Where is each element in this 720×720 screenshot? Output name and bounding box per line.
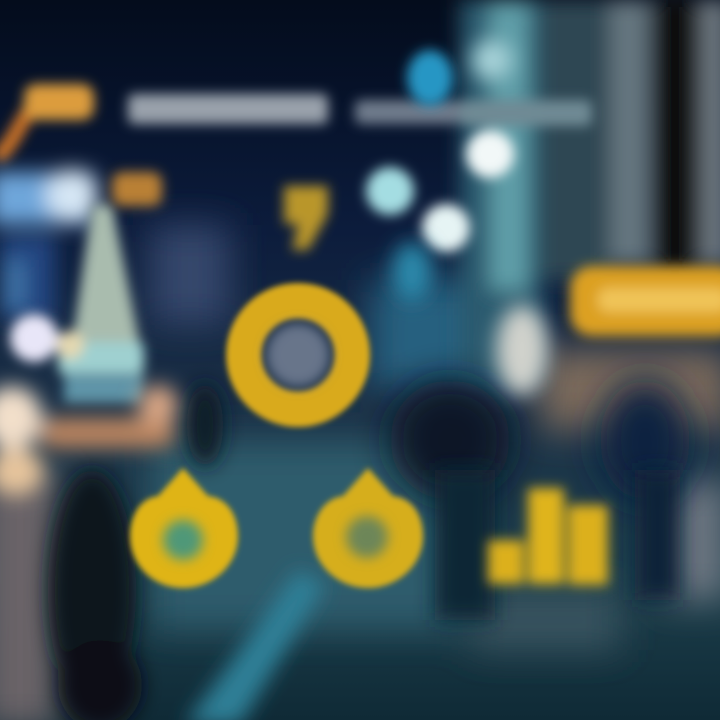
- road light streak: [185, 570, 325, 720]
- icon: orange tag: [112, 172, 162, 206]
- accent: sky blue and white light dots: [366, 40, 548, 395]
- background: buildings on the right: [460, 0, 720, 380]
- chart: yellow bar icon: [488, 488, 608, 585]
- panel: yellow callout pill: [570, 266, 720, 336]
- chart: yellow donut ring: [244, 301, 352, 409]
- heading: unreadable blurred title bars: [128, 94, 592, 126]
- background: silhouettes of pedestrians: [48, 380, 690, 720]
- icon: yellow badge left: [130, 468, 238, 588]
- panel: left lab flask and lights: [0, 169, 178, 496]
- icon: orange growth arrow: [0, 84, 94, 158]
- icon: small yellow marker: [284, 186, 328, 250]
- icon: yellow badge middle: [313, 468, 423, 588]
